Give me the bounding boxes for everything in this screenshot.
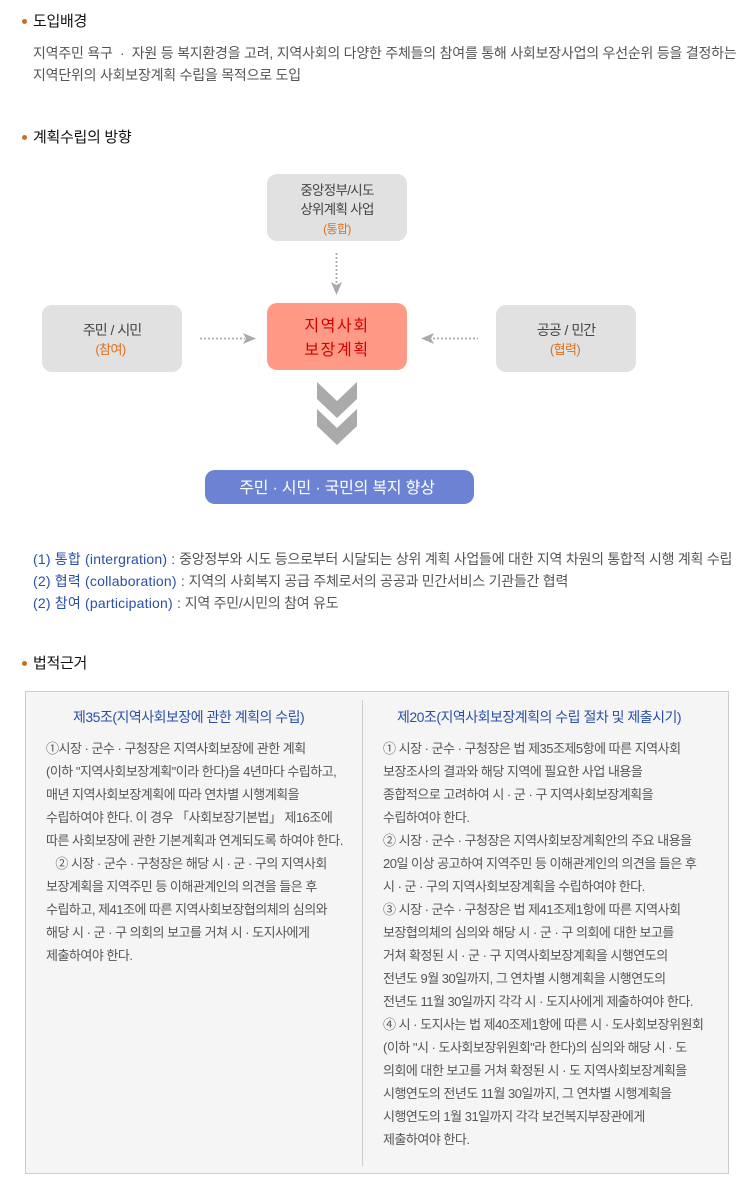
- text: article 20 body: 시행연도의 1월 31일까지 각각 보건복지부장관에게: [383, 1109, 645, 1124]
- box: 주민 / 시민: [42, 305, 182, 372]
- box: 공공 / 민간: [496, 305, 636, 372]
- arrow: right to centre: [421, 333, 478, 344]
- text: article 20 body: 종합적으로 고려하여 시 · 군 · 구 지역사회보장계획을: [383, 787, 653, 802]
- text: article 20 body: 보장조사의 결과와 해당 지역에 필요한 사업 내용을: [383, 764, 642, 779]
- text: article 20 body: 시 · 군 · 구의 지역사회보장계획을 수립하여야 한다.: [383, 879, 645, 894]
- text: article 35 body: 따른 사회보장에 관한 기본계획과 연계되도록 하여야 한다.: [46, 833, 343, 848]
- text: article 20 body: ③ 시장 · 군수 · 구청장은 법 제41조제1항에 따른 지역사회: [383, 902, 681, 917]
- text: background description: [33, 45, 736, 83]
- list: direction definitions: [33, 551, 732, 611]
- box: 주민 / 시민: 주민 / 시민: [83, 322, 141, 338]
- box: 중앙정부/시도: (통합): [323, 222, 351, 236]
- icon: double chevron: [317, 382, 357, 445]
- text: article 20 body: 의회에 대한 보고를 거쳐 확정된 시 · 도 지역사회보장계획을: [383, 1063, 687, 1078]
- text: article 20 body: 전년도 11월 30일까지 각각 시 · 도지사에게 제출하여야 한다.: [383, 994, 693, 1009]
- text: article 20 body: 제출하여야 한다.: [383, 1132, 469, 1147]
- heading: 도입배경: 도입배경: [33, 13, 87, 30]
- heading: article 20: 제20조(지역사회보장계획의 수립 절차 및 제출시기): [397, 709, 681, 725]
- divider line: [362, 700, 363, 1166]
- list: direction definitions: (2) 참여 (participation) : 지역 주민/시민의 참여 유도: [33, 595, 338, 611]
- heading: article 35: 제35조(지역사회보장에 관한 계획의 수립): [73, 709, 304, 725]
- text: article 20 body: [383, 741, 703, 1147]
- text: article 20 body: 20일 이상 공고하여 지역주민 등 이해관계인의 의견을 들은 후: [383, 856, 696, 871]
- text: article 20 body: 거쳐 확정된 시 · 군 · 구 지역사회보장계획을 시행연도의: [383, 948, 668, 963]
- text: article 35 body: ①시장 · 군수 · 구청장은 지역사회보장에 관한 계획: [46, 741, 306, 756]
- box: 공공 / 민간: 공공 / 민간: [537, 322, 595, 338]
- text: article 20 body: ① 시장 · 군수 · 구청장은 법 제35조제5항에 따른 지역사회: [383, 741, 681, 756]
- panel: legal basis: [25, 691, 729, 1174]
- list: direction definitions: (2) 협력 (collaboration) : 지역의 사회복지 공급 주체로서의 공공과 민간서비스 기관들간 협력: [33, 573, 568, 589]
- text: article 35 body: 수립하여야 한다. 이 경우 「사회보장기본법」 제16조에: [46, 810, 332, 825]
- text: background description: 지역주민 욕구 · 자원 등 복지환경을 고려, 지역사회의 다양한 주체들의 참여를 통해 사회보장사업의 우선순위 등을 결정하는: [33, 45, 736, 61]
- text: article 20 body: 시행연도의 전년도 11월 30일까지, 그 연차별 시행계획을: [383, 1086, 671, 1101]
- box: 지역사회 보장계획: 지역사회: [304, 318, 370, 335]
- list: direction definitions: (1) 통합 (intergration) : 중앙정부와 시도 등으로부터 시달되는 상위 계획 사업들에 대한 지역 차원의 통합적 시행 계획 수립: [33, 551, 732, 567]
- text: article 35 body: 제출하여야 한다.: [46, 948, 132, 963]
- box: outcome banner: 주민 · 시민 · 국민의 복지 향상: [239, 480, 435, 497]
- text: article 20 body: (이하 "시 · 도사회보장위원회"라 한다)의 심의와 해당 시 · 도: [383, 1040, 687, 1055]
- heading: 법적근거: 법적근거: [33, 655, 87, 672]
- box: 중앙정부/시도: [267, 174, 407, 241]
- arrow: top to centre: [331, 253, 342, 295]
- text: article 20 body: 수립하여야 한다.: [383, 810, 469, 825]
- text: background description: 지역단위의 사회보장계획 수립을 목적으로 도입: [33, 67, 301, 83]
- box: outcome banner: [205, 470, 474, 504]
- text: article 20 body: 전년도 9월 30일까지, 그 연차별 시행계획을 시행연도의: [383, 971, 666, 986]
- text: article 35 body: 매년 지역사회보장계획에 따라 연차별 시행계획을: [46, 787, 299, 802]
- box: 지역사회 보장계획: [267, 303, 407, 370]
- heading: 계획수립의 방향: 계획수립의 방향: [33, 129, 131, 146]
- text: article 35 body: 수립하고, 제41조에 따른 지역사회보장협의체의 심의와: [46, 902, 327, 917]
- box: 공공 / 민간: (협력): [550, 342, 580, 357]
- box: 주민 / 시민: (참여): [95, 342, 126, 357]
- text: article 20 body: 보장협의체의 심의와 해당 시 · 군 · 구 의회에 대한 보고를: [383, 925, 674, 940]
- box: 지역사회 보장계획: 보장계획: [304, 342, 370, 359]
- text: article 20 body: ④ 시 · 도지사는 법 제40조제1항에 따른 시 · 도사회보장위원회: [383, 1017, 703, 1032]
- arrow: left to centre: [200, 333, 256, 344]
- text: article 20 body: ② 시장 · 군수 · 구청장은 지역사회보장계획안의 주요 내용을: [383, 833, 692, 848]
- box: 중앙정부/시도: 중앙정부/시도: [300, 183, 374, 198]
- text: article 35 body: 해당 시 · 군 · 구 의회의 보고를 거쳐 시 · 도지사에게: [46, 925, 309, 940]
- text: article 35 body: ② 시장 · 군수 · 구청장은 해당 시 · 군 · 구의 지역사회: [55, 856, 327, 871]
- text: article 35 body: [46, 741, 343, 963]
- box: 중앙정부/시도: 상위계획 사업: [300, 202, 374, 217]
- text: article 35 body: 보장계획을 지역주민 등 이해관계인의 의견을 들은 후: [46, 879, 317, 894]
- text: article 35 body: (이하 "지역사회보장계획"이라 한다)을 4년마다 수립하고,: [46, 764, 336, 779]
